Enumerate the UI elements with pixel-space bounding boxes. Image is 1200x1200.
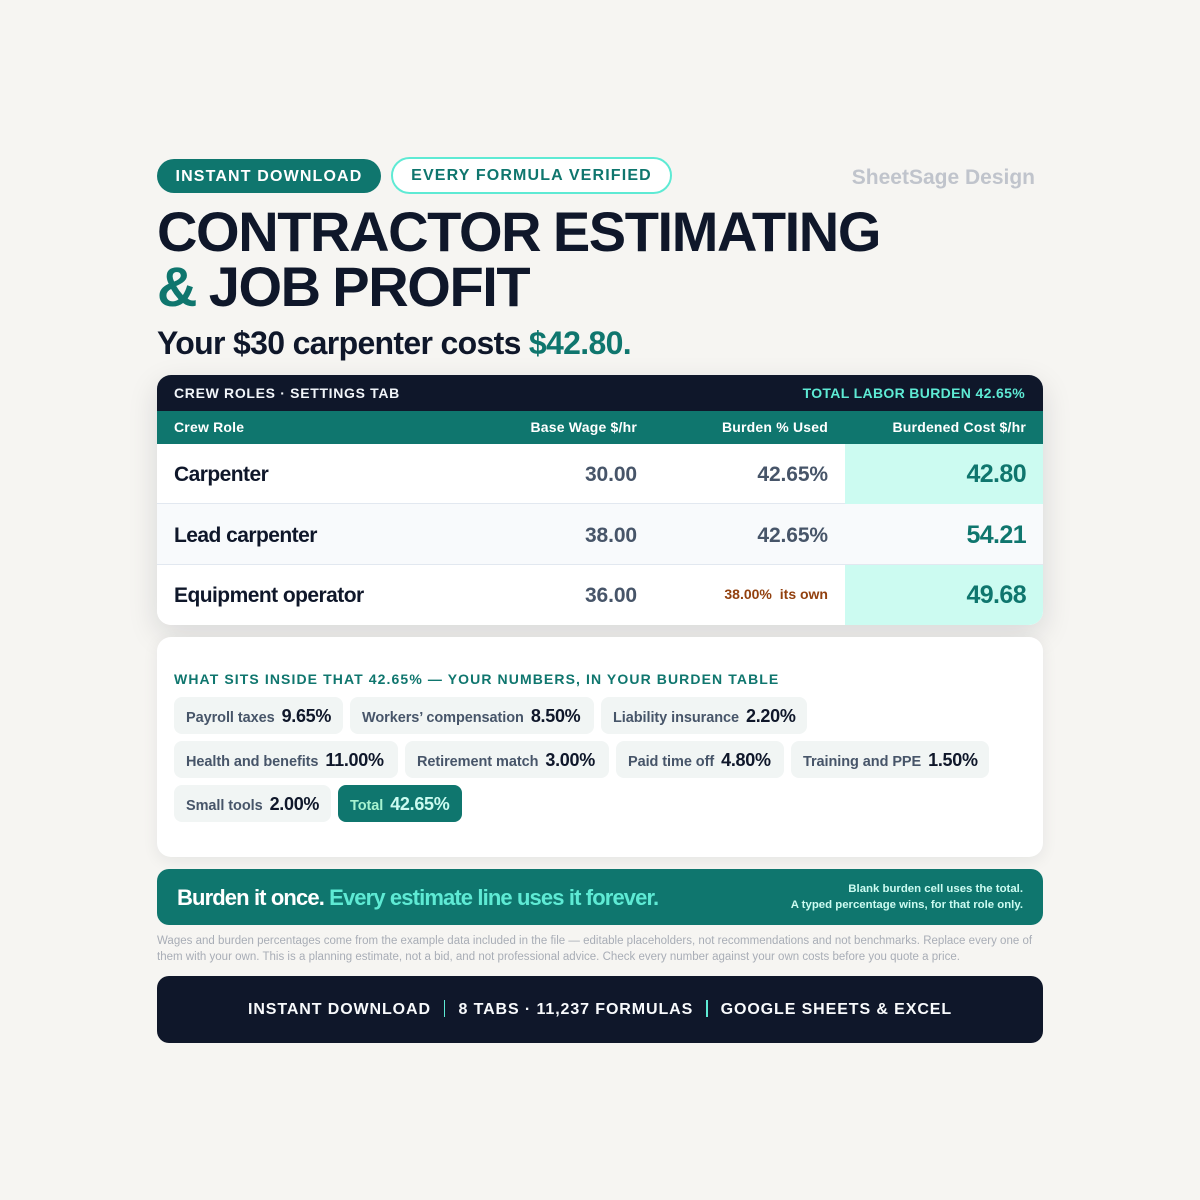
brand name: SheetSage Design [852, 166, 1035, 189]
chip: health and benefits: Health and benefits 11.00% [186, 750, 384, 770]
chip: workers compensation: Workers’ compensation 8.50% [362, 706, 580, 726]
badge: instant download: INSTANT DOWNLOAD [176, 168, 362, 185]
base wage: 36.00 [585, 584, 637, 607]
title: & JOB PROFIT [157, 255, 529, 318]
subtitle: Your $30 carpenter costs $42.80. [157, 325, 631, 361]
header: crew role: Crew Role [174, 419, 244, 435]
chip: retirement match: Retirement match 3.00% [417, 750, 595, 770]
banner headline: Burden it once. Every estimate line uses it forever. [177, 885, 658, 910]
row: equipment operator [157, 565, 1043, 625]
header: burden used: Burden % Used [722, 419, 828, 435]
panel: crew roles table [157, 375, 1043, 625]
chip: paid time off [616, 741, 784, 778]
disclaimer: them with your own. This is a planning estimate, not a bid, and not professional advice. Check every number against your own costs before you quote a price. [157, 951, 960, 963]
burden percent: 42.65% [757, 524, 828, 547]
header: burdened cost: Burdened Cost $/hr [892, 419, 1026, 435]
burdened cost cell: 49.68 [966, 581, 1026, 609]
chip: workers compensation [350, 697, 594, 734]
chip: small tools [174, 785, 331, 822]
footer bar: INSTANT DOWNLOAD 8 TABS · 11,237 FORMULAS GOOGLE SHEETS & EXCEL [248, 1001, 952, 1018]
title: CONTRACTOR ESTIMATING [157, 200, 880, 263]
chip: training and PPE [791, 741, 989, 778]
burdened cost cell [845, 565, 1043, 625]
title [157, 200, 880, 318]
burdened cost: 54.21 [966, 521, 1026, 549]
burdened cost cell: 42.80 [966, 460, 1026, 488]
burdened cost cell [845, 444, 1043, 504]
chip: small tools: Small tools 2.00% [186, 794, 319, 814]
role name: Lead carpenter [174, 524, 317, 547]
role name: Carpenter [174, 463, 268, 486]
disclaimer [157, 935, 1032, 963]
banner note: Blank burden cell uses the total. [848, 883, 1023, 895]
banner note [791, 883, 1023, 911]
chip: liability insurance: Liability insurance 2.20% [613, 706, 796, 726]
chip: total: Total 42.65% [350, 794, 449, 814]
role name: Equipment operator [174, 584, 364, 607]
chip: payroll taxes [174, 697, 343, 734]
badge: every formula verified [391, 157, 672, 194]
base wage: 38.00 [585, 524, 637, 547]
footer bar [157, 976, 1043, 1043]
panel heading: WHAT SITS INSIDE THAT 42.65% — YOUR NUMBERS, IN YOUR BURDEN TABLE [174, 671, 779, 687]
chip: total [338, 785, 462, 822]
banner note: A typed percentage wins, for that role only. [791, 899, 1023, 911]
chip: health and benefits [174, 741, 398, 778]
base wage: 30.00 [585, 463, 637, 486]
banner: burden it once [157, 869, 1043, 925]
chip: paid time off: Paid time off 4.80% [628, 750, 771, 770]
total labor burden: TOTAL LABOR BURDEN 42.65% [803, 385, 1025, 401]
row: lead carpenter [157, 504, 1043, 565]
row: carpenter [157, 444, 1043, 504]
burden percent: 42.65% [757, 463, 828, 486]
table title bar [157, 375, 1043, 411]
chip: payroll taxes: Payroll taxes 9.65% [186, 706, 331, 726]
table title: CREW ROLES · SETTINGS TAB [174, 385, 400, 401]
badge: every formula verified: EVERY FORMULA VERIFIED [411, 167, 652, 184]
burden override: 38.00% its own [724, 586, 828, 602]
panel: burden breakdown [157, 637, 1043, 857]
badge: instant download [157, 159, 381, 193]
header: base wage: Base Wage $/hr [530, 419, 637, 435]
chip: liability insurance [601, 697, 807, 734]
chip: training and PPE: Training and PPE 1.50% [803, 750, 978, 770]
column headers [157, 411, 1043, 444]
chip: retirement match [405, 741, 609, 778]
disclaimer: Wages and burden percentages come from the example data included in the file — editable placeholders, not recommendations and not benchmarks. Replace every one of [157, 935, 1032, 947]
